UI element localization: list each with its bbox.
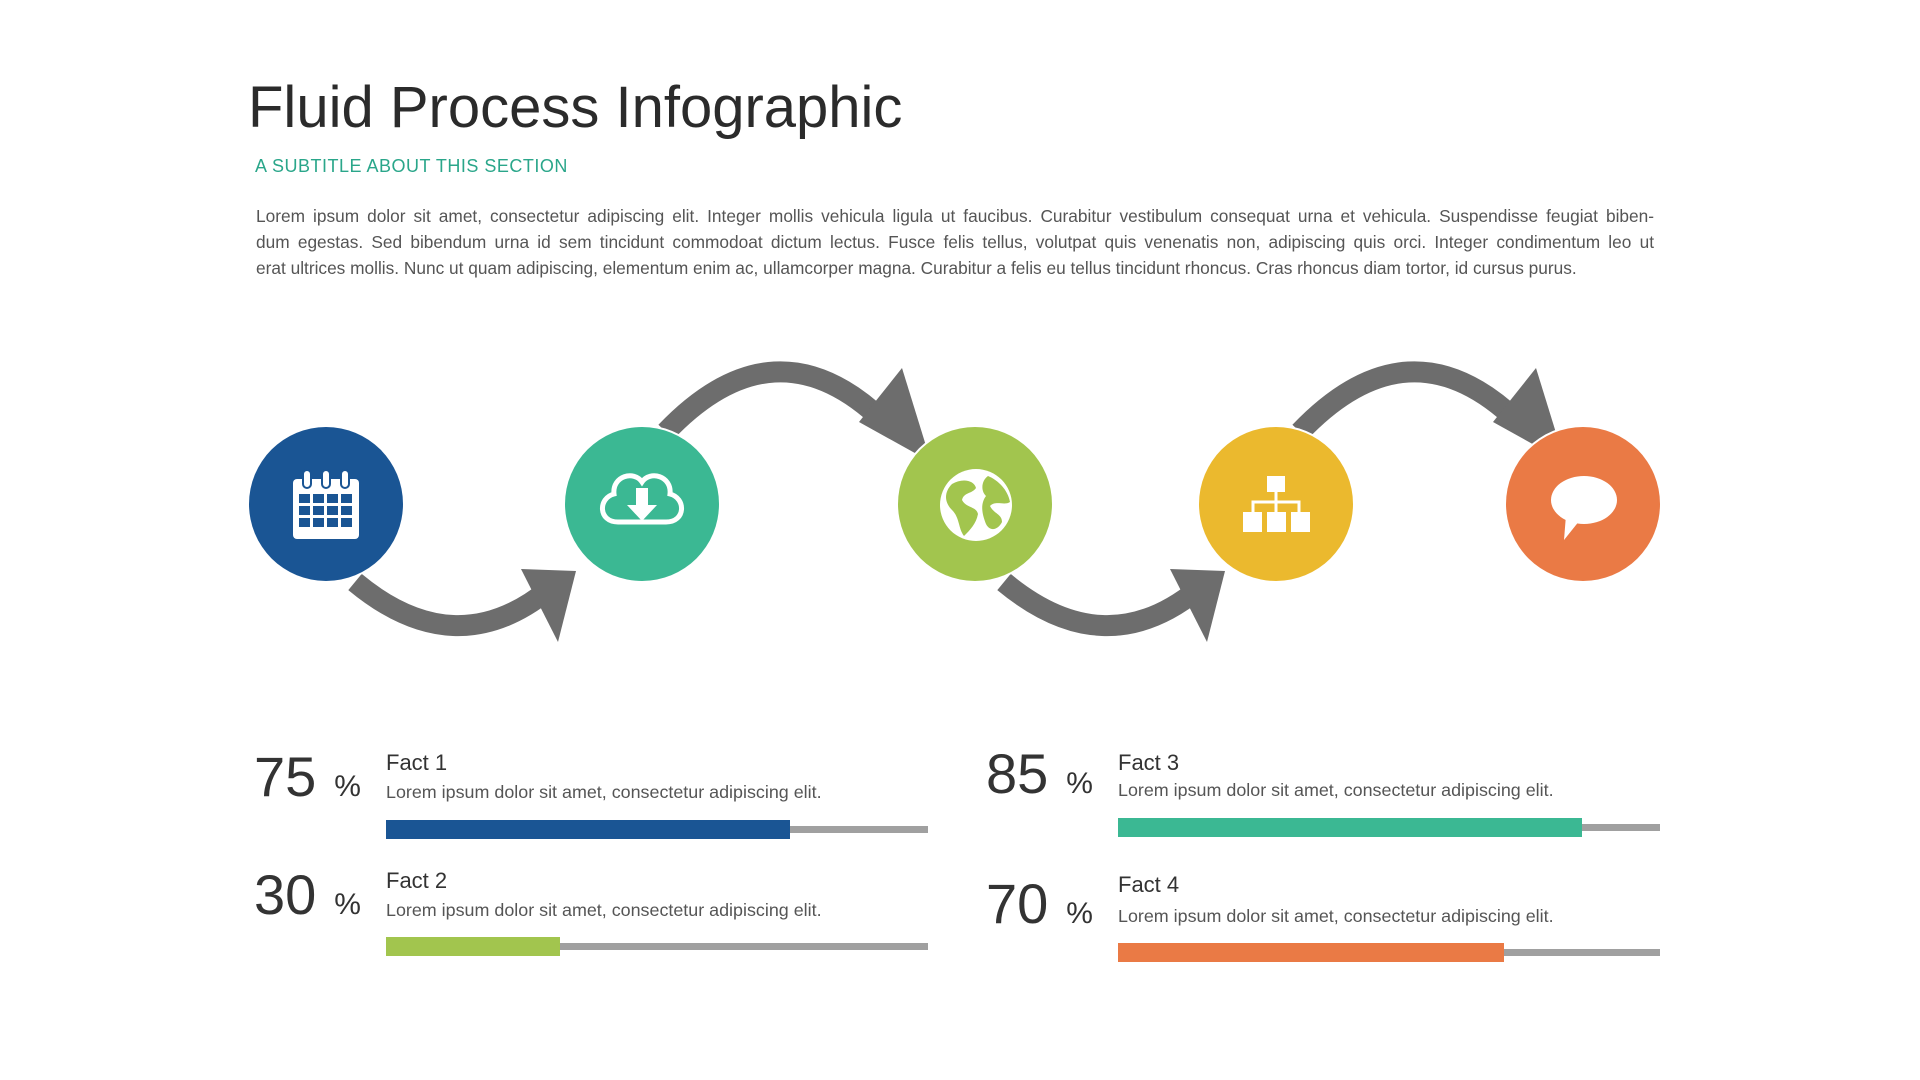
stat: fact 1 — [254, 745, 928, 839]
step 3: globe — [896, 425, 1054, 583]
progress bar — [386, 943, 928, 950]
value 30%: 30 % — [254, 863, 361, 926]
description: Lorem ipsum dolor sit amet, consectetur adipiscing elit. — [386, 900, 822, 920]
step 4: hierarchy — [1197, 425, 1355, 583]
step 5: speech bubble — [1504, 425, 1662, 583]
description: Lorem ipsum dolor sit amet, consectetur adipiscing elit. — [1118, 906, 1554, 926]
title: Fluid Process Infographic — [248, 75, 902, 140]
arrow 1 — [355, 569, 576, 642]
description: Lorem ipsum dolor sit amet, consectetur adipiscing elit. — [1118, 780, 1554, 800]
intro paragraph: dum egestas. Sed bibendum urna id sem tincidunt commodoat dictum lectus. Fusce felis tellus, volutpat quis venenatis non, adipiscing quis orci. Integer condimentum leo ut — [256, 232, 1654, 252]
label: Fact 1 — [386, 750, 447, 775]
intro paragraph: erat ultrices mollis. Nunc ut quam adipiscing, elementum enim ac, ullamcorper magna. Curabitur a felis eu tellus tincidunt rhoncus. Cras rhoncus diam tortor, id cursus purus. — [256, 258, 1577, 278]
value 70%: 70 % — [986, 872, 1093, 935]
arrow 4 — [1300, 368, 1565, 462]
label: Fact 4 — [1118, 872, 1179, 897]
stat: fact 4 — [986, 872, 1660, 962]
subtitle: A SUBTITLE ABOUT THIS SECTION — [255, 156, 568, 176]
stat: fact 2 — [254, 863, 928, 956]
label: Fact 2 — [386, 868, 447, 893]
arrow 2 — [666, 368, 931, 462]
step 1: calendar — [247, 425, 405, 583]
description: Lorem ipsum dolor sit amet, consectetur adipiscing elit. — [386, 782, 822, 802]
intro paragraph: Lorem ipsum dolor sit amet, consectetur adipiscing elit. Integer mollis vehicula ligula ut faucibus. Curabitur vestibulum consequat urna et vehicula. Suspendisse feugiat biben- — [256, 206, 1654, 226]
label: Fact 3 — [1118, 750, 1179, 775]
progress bar — [386, 826, 928, 833]
progress bar — [1118, 949, 1660, 956]
progress bar — [1118, 824, 1660, 831]
step 2: cloud download — [563, 425, 721, 583]
value 85%: 85 % — [986, 742, 1093, 805]
stat: fact 3 — [986, 742, 1660, 837]
value 75%: 75 % — [254, 745, 361, 808]
intro paragraph — [256, 206, 1654, 278]
arrow 3 — [1004, 569, 1225, 642]
